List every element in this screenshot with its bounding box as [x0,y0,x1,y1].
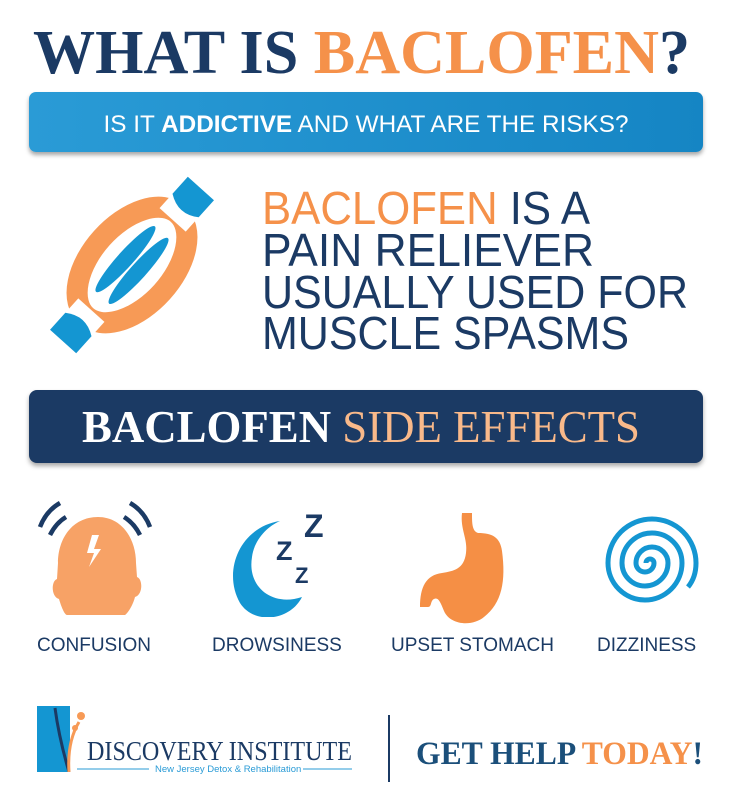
icon: drowsiness moon: Z [295,563,308,588]
heading: side effects: BACLOFEN SIDE EFFECTS [82,401,640,452]
banner: subtitle [29,92,703,152]
call to action: GET HELP TODAY! [416,736,703,772]
text block: description: MUSCLE SPASMS [262,307,629,359]
text block: description: BACLOFEN IS A [262,182,590,234]
divider [388,715,390,782]
icon: confusion head [38,501,152,615]
banner: subtitle: IS IT ADDICTIVE AND WHAT ARE THE RISKS? [104,111,628,138]
icon: dizziness spiral [606,516,698,602]
title: WHAT IS BACLOFEN? [33,19,690,87]
icon: drowsiness moon [233,508,324,617]
labels: CONFUSION [37,635,151,656]
icon: drowsiness moon: Z [304,508,324,544]
icon: muscle [50,176,214,354]
labels [37,635,696,656]
text block: description [262,182,688,359]
text block: description: USUALLY USED FOR [262,266,688,318]
logo [37,706,352,774]
text block: description: PAIN RELIEVER [262,224,594,276]
heading: side effects [29,390,703,463]
labels: UPSET STOMACH [391,635,554,656]
icon: stomach [420,513,504,624]
labels: DROWSINESS [212,635,342,656]
labels: DIZZINESS [597,635,696,656]
icon: drowsiness moon: Z [276,536,292,566]
